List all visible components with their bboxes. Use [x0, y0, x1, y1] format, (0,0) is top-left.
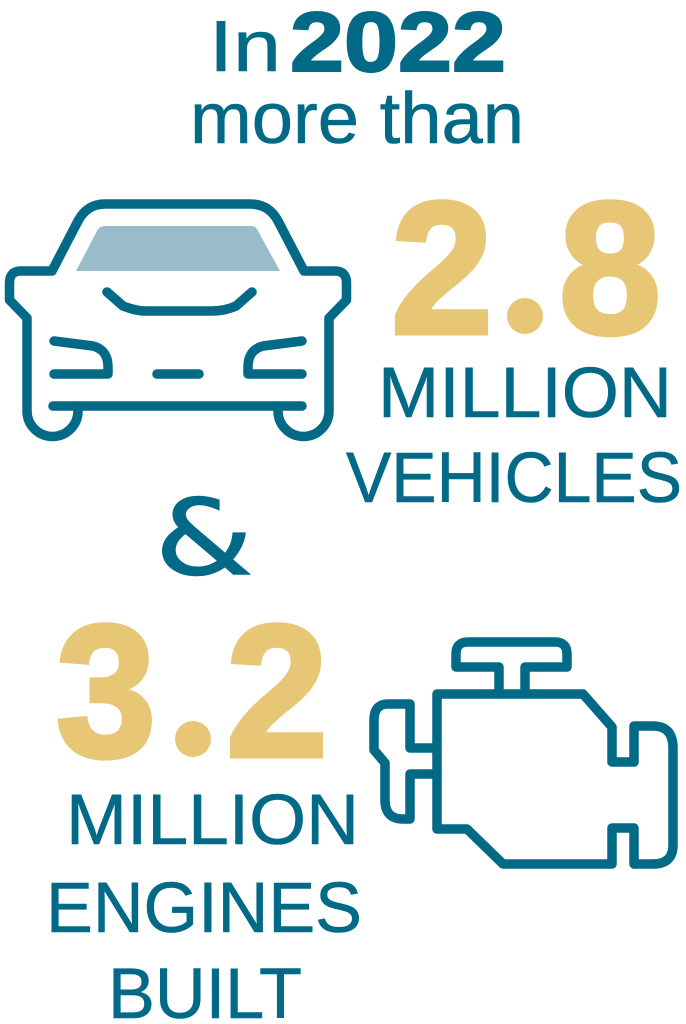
label: million engines built [46, 781, 362, 1024]
label: million vehicles [346, 354, 682, 518]
title line 1 [209, 0, 506, 89]
statistic: 2.8 [391, 163, 661, 373]
statistic: 3.2: 3 [56, 586, 156, 796]
statistic: 3.2 [56, 586, 328, 796]
statistic: 2.8: 8 [559, 163, 661, 373]
statistic: 3.2: 2 [226, 586, 328, 796]
title line 2: more than [190, 79, 524, 159]
label: million vehicles: MILLION [378, 354, 672, 433]
label: million engines built: ENGINES [46, 869, 362, 948]
title line 1: In [209, 7, 281, 87]
icon: engine [374, 642, 673, 864]
ampersand: & [155, 477, 253, 599]
icon: car [10, 204, 346, 436]
statistic: 3.2: . [176, 640, 209, 774]
label: million engines built: MILLION [66, 781, 359, 860]
statistic: 2.8: . [508, 217, 541, 351]
statistic: 2.8: 2 [391, 163, 493, 373]
